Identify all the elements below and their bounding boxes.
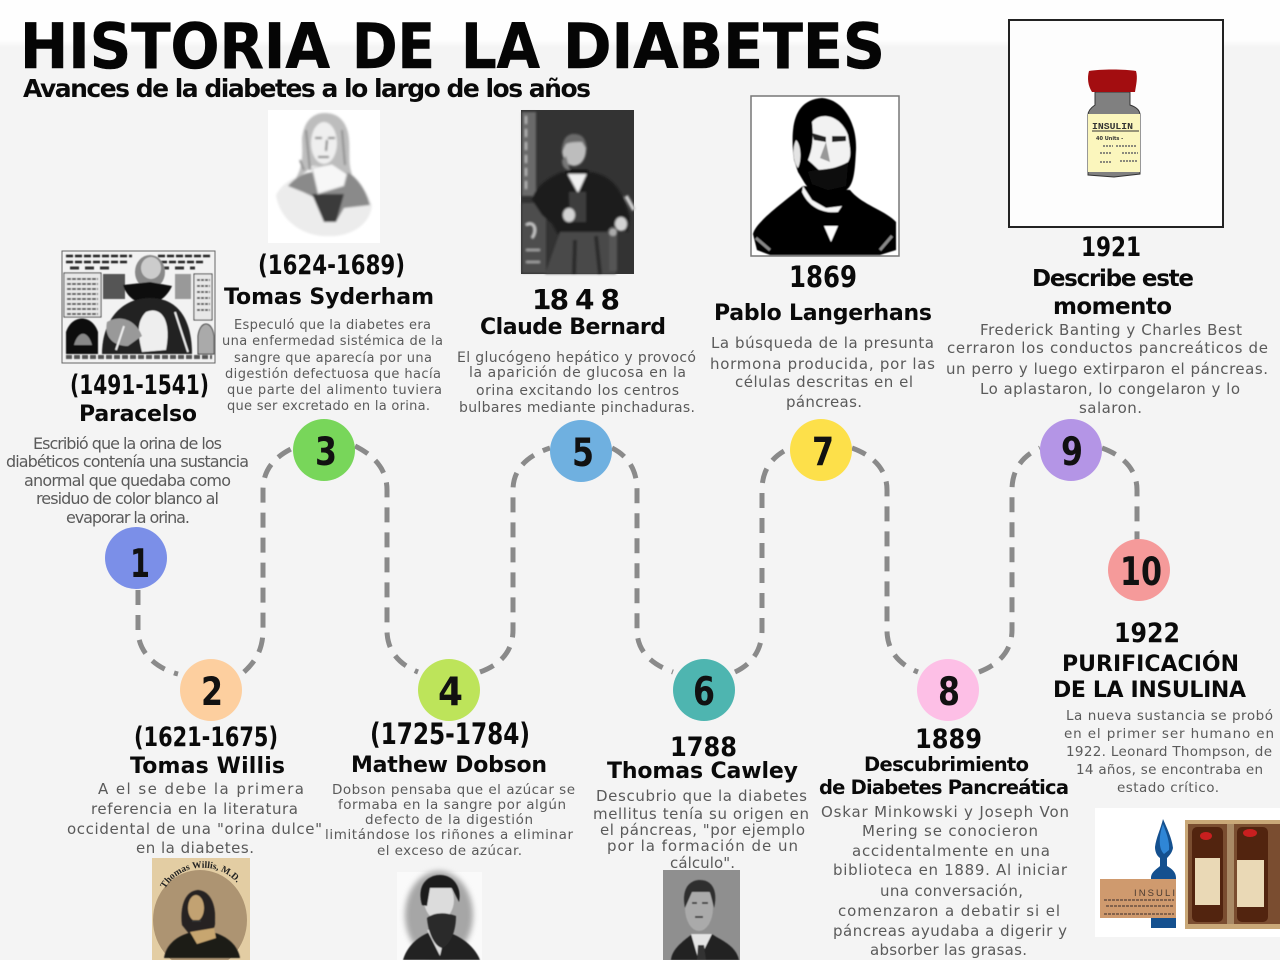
panel: Tomas Syderham	[222, 110, 443, 414]
description: Mering se conocieron	[862, 822, 1038, 840]
description: una conversación,	[880, 882, 1023, 900]
description: células descritas en el	[735, 373, 913, 391]
description: Dobson pensaba que el azúcar se	[332, 782, 575, 798]
description: Oskar Minkowski y Joseph Von	[821, 803, 1069, 821]
description: una enfermedad sistémica de la	[222, 334, 443, 349]
description	[325, 782, 575, 859]
image: insulin ampoule and boxed vials	[1095, 808, 1280, 937]
panel: 1922 purification	[1053, 618, 1280, 937]
description	[593, 787, 809, 872]
description: comenzaron a debatir si el	[838, 902, 1060, 920]
description: absorber las grasas.	[870, 941, 1027, 959]
description	[1064, 708, 1274, 796]
description: evaporar la orina.	[66, 508, 190, 527]
description: Especuló que la diabetes era	[234, 318, 431, 333]
date: 18 4 8	[532, 283, 620, 316]
description	[6, 434, 249, 527]
description: bulbares mediante pinchaduras.	[459, 400, 695, 416]
description	[67, 780, 322, 857]
date: (1624-1689)	[258, 250, 405, 281]
marker 6: 6	[693, 670, 715, 715]
date: (1725-1784)	[370, 717, 530, 751]
image: Langerhans portrait	[751, 96, 899, 256]
title: DE	[352, 10, 435, 83]
description: defecto de la digestión	[365, 812, 533, 828]
marker 8	[917, 659, 979, 721]
heading	[1053, 651, 1246, 703]
image: insulin bottle: INSULIN	[1092, 121, 1133, 132]
image: insulin ampoule and boxed vials: INSULI	[1134, 888, 1175, 899]
description: accidentalmente en una	[852, 842, 1050, 860]
description: cálculo".	[670, 854, 735, 872]
name: Thomas Cawley	[607, 759, 798, 784]
marker 6	[673, 659, 735, 721]
description: residuo de color blanco al	[36, 489, 219, 508]
panel: 1921 insulin	[946, 20, 1268, 417]
description: 14 años, se encontraba en	[1076, 762, 1263, 778]
image: Paracelso woodcut	[62, 251, 215, 363]
date: 1889	[915, 724, 982, 755]
title: LA	[461, 10, 540, 83]
description: El glucógeno hepático y provocó	[457, 350, 696, 366]
description: un perro y luego extirparon el páncreas.	[946, 360, 1268, 378]
marker 7: 7	[812, 430, 834, 475]
name: Mathew Dobson	[351, 753, 547, 778]
description: 1922. Leonard Thompson, de	[1066, 744, 1272, 760]
description: formaba en la sangre por algún	[338, 797, 566, 813]
image: Cawley portrait	[663, 870, 740, 960]
description: referencia en la literatura	[91, 800, 298, 818]
description: sangre que aparecía por una	[234, 351, 432, 366]
marker 7	[790, 419, 852, 481]
marker 1	[105, 527, 167, 589]
description	[946, 321, 1268, 417]
heading: momento	[1053, 294, 1172, 320]
panel: 1889 discovery	[819, 724, 1069, 959]
image: insulin bottle	[1009, 20, 1223, 227]
name: Claude Bernard	[480, 315, 666, 340]
image: Willis engraving: Thomas Willis, M.D.	[160, 861, 238, 888]
description: Descubrio que la diabetes	[596, 787, 807, 805]
description: en la diabetes.	[136, 839, 254, 857]
image: Willis engraving	[152, 858, 250, 960]
date: 1869	[789, 260, 857, 294]
description: limitándose los riñones a eliminar	[325, 827, 573, 843]
date: 1921	[1081, 232, 1141, 263]
description: el exceso de azúcar.	[377, 843, 522, 859]
panel: Mathew Dobson	[325, 717, 575, 960]
description: que ser excretado en la orina.	[227, 399, 430, 414]
marker 9: 9	[1061, 430, 1083, 475]
title: DIABETES	[563, 10, 885, 83]
description: digestión defectuosa que hacía	[225, 367, 441, 382]
name: Pablo Langerhans	[714, 301, 932, 326]
date: (1491-1541)	[70, 370, 209, 401]
image: Bernard photograph	[521, 110, 634, 274]
date: 1788	[670, 732, 737, 763]
description: occidental de una "orina dulce"	[67, 820, 322, 838]
dashed timeline path	[138, 446, 1137, 674]
image: Syderham engraving	[268, 110, 380, 243]
description: hormona producida, por las	[710, 355, 935, 373]
marker 4	[418, 659, 480, 721]
date: (1621-1675)	[134, 722, 278, 753]
description: diabéticos contenía una sustancia	[6, 452, 249, 471]
description: A el se debe la primera	[98, 780, 304, 798]
name: Tomas Syderham	[224, 285, 434, 310]
description: Escribió que la orina de los	[33, 434, 222, 453]
description: por la formación de un	[607, 837, 798, 855]
description: biblioteca en 1889. Al iniciar	[833, 861, 1068, 879]
description	[821, 803, 1069, 959]
description: en el primer ser humano en	[1064, 726, 1274, 742]
marker 3: 3	[315, 430, 337, 475]
marker 3	[293, 419, 355, 481]
description: el páncreas, "por ejemplo	[600, 821, 805, 839]
marker 2	[180, 659, 242, 721]
heading	[1032, 266, 1194, 320]
description: orina excitando los centros	[476, 383, 679, 399]
marker 10	[1108, 539, 1170, 601]
description: cerraron los conductos pancreáticos de	[947, 339, 1268, 357]
heading: Descubrimiento	[864, 753, 1029, 776]
marker 9	[1040, 419, 1102, 481]
description: La nueva sustancia se probó	[1066, 708, 1273, 724]
panel: Pablo Langerhans	[710, 96, 935, 411]
marker 2: 2	[201, 670, 223, 715]
image: insulin bottle: 40 Units -	[1096, 136, 1123, 142]
title: HISTORIA	[20, 10, 330, 83]
date: 1922	[1114, 618, 1180, 649]
marker 4: 4	[438, 670, 463, 715]
description: la aparición de glucosa en la	[469, 365, 686, 381]
description: Lo aplastaron, lo congelaron y lo	[980, 380, 1240, 398]
panel: Paracelso	[6, 251, 249, 527]
image: Dobson portrait	[397, 871, 482, 960]
heading: de Diabetes Pancreática	[819, 776, 1069, 799]
description	[710, 334, 935, 411]
panel: Tomas Willis	[67, 722, 322, 960]
description: estado crítico.	[1117, 780, 1219, 796]
description: páncreas.	[786, 393, 862, 411]
panel: Claude Bernard	[457, 110, 696, 416]
marker 5	[550, 420, 612, 482]
heading: DE LA INSULINA	[1053, 678, 1246, 703]
title	[20, 10, 885, 83]
description: La búsqueda de la presunta	[711, 334, 934, 352]
name: Tomas Willis	[130, 754, 285, 779]
panel: Thomas Cawley	[593, 732, 809, 960]
heading	[819, 753, 1069, 799]
description: páncreas ayudaba a digerir y	[833, 922, 1067, 940]
name: Paracelso	[79, 402, 197, 427]
description	[457, 350, 696, 416]
description: mellitus tenía su origen en	[593, 805, 809, 823]
heading: PURIFICACIÓN	[1062, 651, 1239, 677]
marker 8: 8	[938, 670, 960, 715]
heading: Describe este	[1032, 266, 1194, 292]
description	[222, 318, 443, 414]
description: salaron.	[1079, 399, 1142, 417]
marker 1: 1	[130, 542, 150, 587]
marker 5: 5	[572, 431, 594, 476]
marker 10: 10	[1120, 550, 1162, 595]
subtitle: Avances de la diabetes a lo largo de los años	[23, 74, 591, 103]
description: anormal que quedaba como	[24, 471, 231, 490]
description: Frederick Banting y Charles Best	[980, 321, 1242, 339]
description: que parte del alimento tuviera	[227, 383, 442, 398]
